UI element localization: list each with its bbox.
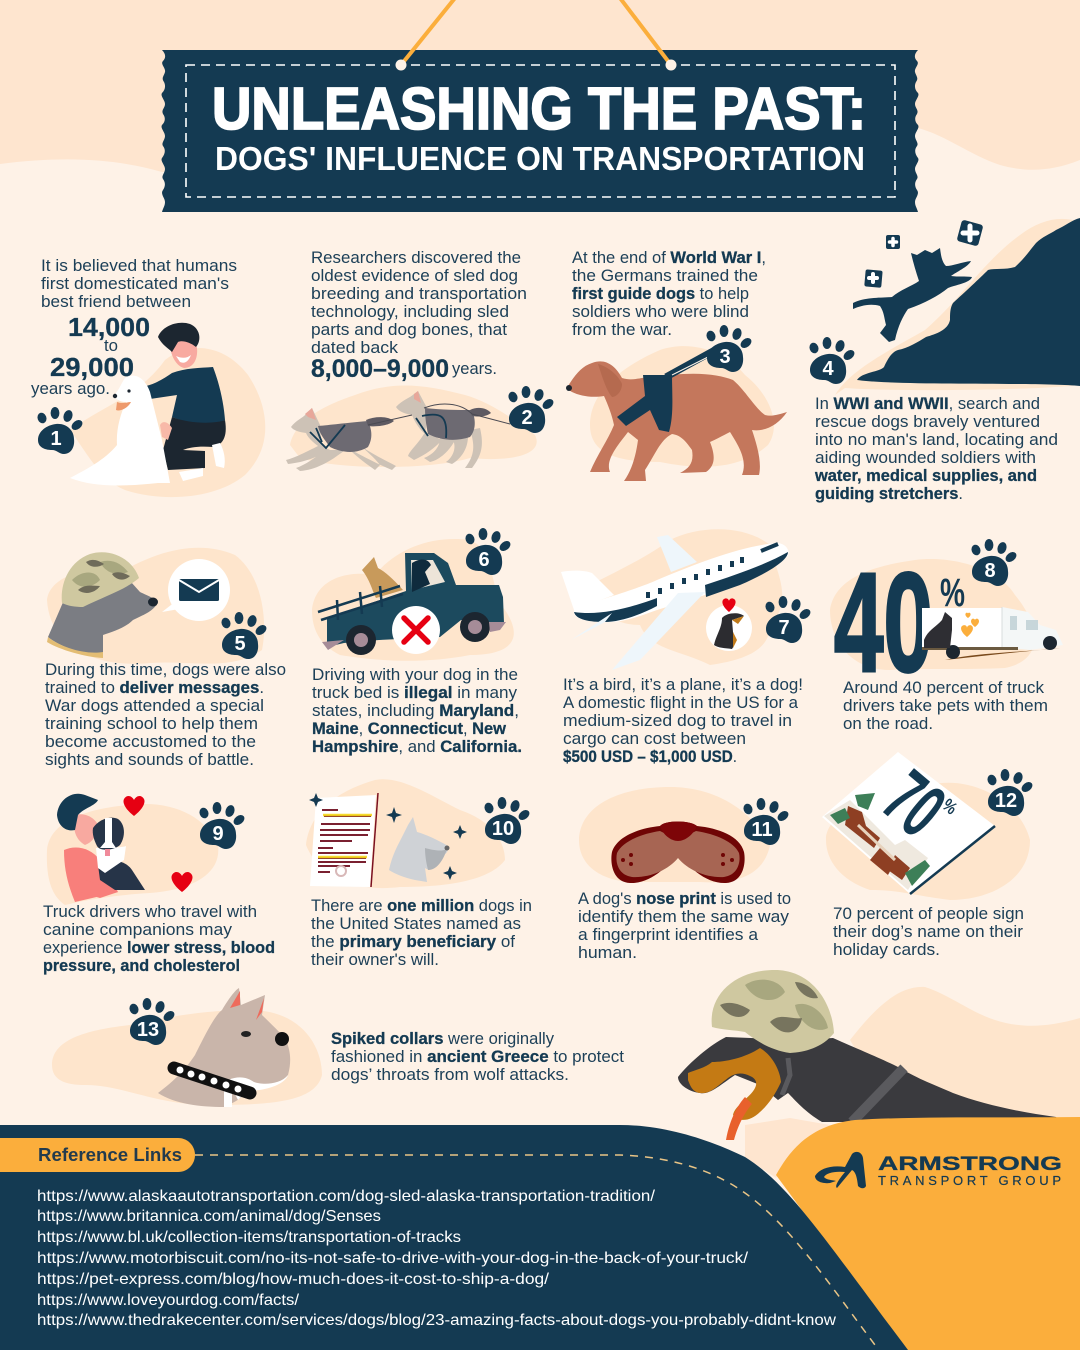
shepherd dog in truck bed — [362, 557, 403, 598]
percent sign: % — [940, 571, 965, 615]
fact 1 text: years ago. — [31, 380, 110, 398]
reference url list: https://www.loveyourdog.com/facts/ — [37, 1292, 300, 1309]
paw 3 — [705, 325, 753, 372]
logo mark — [815, 1152, 866, 1188]
fact 5 text: become accustomed to the — [45, 733, 256, 751]
paw 10 — [483, 797, 531, 844]
fact 10 text: the United States named as — [311, 915, 521, 933]
fact 4 text: In WWI and WWII, search and — [815, 395, 1040, 413]
fact 3 text: from the war. — [572, 321, 672, 339]
fact 9 text: pressure, and cholesterol — [43, 957, 240, 975]
fact 4 text: into no man's land, locating and — [815, 431, 1058, 449]
stat 29,000: 29,000 — [50, 352, 134, 382]
illustration: will document and schnauzer — [309, 793, 467, 887]
fact 12 text: holiday cards. — [833, 941, 940, 959]
paw 10: 10 — [492, 818, 514, 840]
logo: Armstrong Transport Group — [815, 1152, 1062, 1188]
top peach wave — [0, 0, 1080, 172]
fact 11 text — [578, 890, 791, 962]
illustration: dog nose print — [611, 822, 745, 883]
illustration: holiday card with 70 percent — [822, 752, 995, 894]
illustration: war dog with helmet and message — [47, 552, 230, 658]
peach blobs behind illustrations — [47, 219, 1080, 1125]
fact 10 text: the primary beneficiary of — [311, 933, 515, 951]
paw 4: 4 — [822, 358, 834, 380]
fact 3 text: the Germans trained the — [572, 267, 758, 285]
big 40 percent figure: 40 — [834, 543, 933, 701]
paw 12 — [986, 769, 1034, 816]
fact 5 text — [45, 661, 286, 769]
fact 2 text: years. — [452, 360, 497, 378]
fact 3 text: soldiers who were blind — [572, 303, 749, 321]
hanging ropes — [401, 0, 671, 65]
fact 1 text: best friend between — [41, 293, 191, 311]
paw 13: 13 — [137, 1019, 159, 1041]
reference url list: https://www.britannica.com/animal/dog/Senses — [37, 1208, 381, 1225]
dashed connector — [195, 1155, 875, 1345]
Doberman tongue — [726, 1097, 752, 1140]
fact 8 text — [843, 679, 1048, 733]
fact 8 text: on the road. — [843, 715, 933, 733]
fact 5 text: trained to deliver messages. — [45, 679, 264, 697]
fact 1 text: first domesticated man's — [41, 275, 229, 293]
fact 6 text: truck bed is illegal in many — [312, 684, 518, 702]
hearts — [123, 796, 145, 816]
paw 8 — [970, 539, 1018, 586]
banner stitching — [186, 65, 895, 197]
fact 6 text: Driving with your dog in the — [312, 666, 518, 684]
stat 14,000: 14,000 — [68, 312, 150, 342]
fact 8 text: Around 40 percent of truck — [843, 679, 1045, 697]
stat 8,000-9,000: 8,000–9,000 — [311, 355, 449, 383]
fact 10 text: their owner's will. — [311, 951, 439, 969]
dog A — [286, 408, 396, 471]
fact 7 text: A domestic flight in the US for a — [563, 694, 799, 712]
fact 2 text: dated back — [311, 339, 399, 357]
paw 4 — [808, 337, 856, 384]
leaping dog — [853, 248, 972, 342]
paw 7: 7 — [778, 617, 790, 639]
fact 7 text: cargo can cost between — [563, 730, 746, 748]
subtitle text: DOGS' INFLUENCE ON TRANSPORTATION — [215, 141, 865, 178]
reference url list — [37, 1188, 837, 1329]
paw 2: 2 — [521, 407, 533, 429]
footer orange panel — [776, 1117, 1080, 1350]
peach wedge behind footer — [745, 1118, 830, 1178]
fact 9 text: experience lower stress, blood — [43, 939, 275, 957]
fact 9 text: Truck drivers who travel with — [43, 903, 257, 921]
fact 5 text: During this time, dogs were also — [45, 661, 286, 679]
paw 2 — [507, 386, 555, 433]
fact 13 text — [331, 1030, 624, 1084]
fact 2 text: Researchers discovered the — [311, 249, 521, 267]
fact 5 text: sights and sounds of battle. — [45, 751, 254, 769]
paw 9 — [198, 802, 246, 849]
paw 9: 9 — [212, 823, 224, 845]
reference links pill: Reference Links — [38, 1145, 182, 1165]
dark dog in cab — [412, 559, 431, 592]
title text: UNLEASHING THE PAST: — [212, 76, 866, 142]
fact 2 text: technology, including sled — [311, 303, 509, 321]
fact 12 text: 70 percent of people sign — [833, 905, 1024, 923]
fact 10 text: There are one million dogs in — [311, 897, 532, 915]
paw 3: 3 — [719, 346, 731, 368]
fact 7 text: medium-sized dog to travel in — [563, 712, 792, 730]
paw 7 — [764, 596, 812, 643]
fact 11 text: a fingerprint identifies a — [578, 926, 759, 944]
reference url list: https://www.bl.uk/collection-items/transportation-of-tracks — [37, 1229, 461, 1246]
reference url list: https://www.motorbiscuit.com/no-its-not-safe-to-drive-with-your-dog-in-the-back-of-your-truck/ — [37, 1250, 749, 1267]
fact 8 text: drivers take pets with them — [843, 697, 1048, 715]
paw 11 — [742, 798, 790, 845]
rope eyelets — [396, 60, 676, 70]
fact 6 text: Hampshire, and California. — [312, 738, 522, 756]
illustration: Doberman with camouflage helmet — [678, 970, 1060, 1122]
fact 6 text: states, including Maryland, — [312, 702, 519, 720]
paw 6: 6 — [478, 549, 490, 571]
fact 1 text: It is believed that humans — [41, 257, 237, 275]
fact 3 text: first guide dogs to help — [572, 285, 749, 303]
fact 9 text: canine companions may — [43, 921, 233, 939]
fact 13 text: Spiked collars were originally — [331, 1030, 555, 1048]
fact 1 text: to — [104, 337, 118, 355]
fact 2 text: parts and dog bones, that — [311, 321, 507, 339]
paw 1: 1 — [50, 428, 62, 450]
fact 10 text — [311, 897, 532, 969]
fact 12 text: their dog’s name on their — [833, 923, 1024, 941]
fact 12 text — [833, 905, 1024, 959]
fact 4 text: rescue dogs bravely ventured — [815, 413, 1040, 431]
fact 4 text: water, medical supplies, and — [814, 467, 1037, 485]
footer navy panel — [0, 1125, 908, 1350]
fact 5 text: War dogs attended a special — [45, 697, 264, 715]
illustration: holiday card with 70 percent: 70 — [867, 754, 962, 853]
fact 7 text: It’s a bird, it’s a plane, it’s a dog! — [563, 676, 803, 694]
fact 2 text: oldest evidence of sled dog — [311, 267, 518, 285]
fact 2 text: breeding and transportation — [311, 285, 527, 303]
fact 2 text — [311, 249, 527, 383]
fact 5 text: training school to help them — [45, 715, 258, 733]
fact 6 text: Maine, Connecticut, New — [312, 720, 506, 738]
illustration: two sled dogs — [286, 391, 510, 471]
fact 3 text: At the end of World War I, — [572, 249, 766, 267]
fact 11 text: identify them the same way — [578, 908, 790, 926]
fact 7 text — [563, 676, 803, 766]
illustration: driver hugging dog — [57, 794, 193, 902]
fact 11 text: A dog's nose print is used to — [578, 890, 791, 908]
paw 12: 12 — [995, 790, 1017, 812]
fact 9 text — [43, 903, 275, 975]
fact 1 text — [31, 257, 237, 398]
fact 4 text: aiding wounded soldiers with — [815, 449, 1036, 467]
paw 6 — [464, 528, 512, 575]
fact 3 text — [572, 249, 766, 339]
fact 4 text: guiding stretchers. — [815, 485, 963, 503]
illustration: guide dog with harness — [566, 350, 787, 481]
fact 4 text — [814, 395, 1058, 503]
reference url list: https://pet-express.com/blog/how-much-does-it-cost-to-ship-a-dog/ — [37, 1271, 550, 1288]
fact 13 text: fashioned in ancient Greece to protect — [331, 1048, 624, 1066]
fact 6 text — [312, 666, 522, 756]
paw 5: 5 — [234, 633, 246, 655]
paw 5 — [220, 612, 268, 659]
fact 13 text: dogs’ throats from wolf attacks. — [331, 1066, 569, 1084]
no symbol — [392, 606, 440, 654]
reference url list: https://www.thedrakecenter.com/services/dogs/blog/23-amazing-facts-about-dogs-you-probably-didnt-know — [37, 1312, 837, 1329]
illustration: man with white dog — [70, 323, 226, 485]
title banner — [162, 0, 918, 212]
paw badges — [36, 325, 1034, 1045]
reference links pill — [0, 1138, 195, 1172]
paw 13 — [128, 998, 176, 1045]
illustration: airplane — [561, 535, 789, 670]
logo: Armstrong Transport Group: TRANSPORT GROUP — [878, 1173, 1061, 1188]
paw 11: 11 — [751, 819, 773, 841]
fact 11 text: human. — [578, 944, 637, 962]
dog in circle with heart — [706, 605, 752, 651]
paw 8: 8 — [984, 560, 996, 582]
illustration: pet truck — [922, 607, 1063, 660]
paw 1 — [36, 407, 84, 454]
illustration: holiday card with 70 percent: % — [938, 795, 961, 818]
illustration: rescue dog silhouette on navy hill — [853, 218, 1080, 386]
illustration: dog with spiked collar — [158, 988, 290, 1107]
dog B — [396, 391, 491, 468]
fact 7 text: $500 USD – $1,000 USD. — [563, 748, 737, 766]
medical boxes — [864, 220, 983, 288]
logo: Armstrong Transport Group: ARMSTRONG — [878, 1154, 1062, 1175]
illustration: pickup truck with dogs — [318, 553, 506, 655]
reference url list: https://www.alaskaautotransportation.com/dog-sled-alaska-transportation-tradition/ — [37, 1188, 656, 1205]
